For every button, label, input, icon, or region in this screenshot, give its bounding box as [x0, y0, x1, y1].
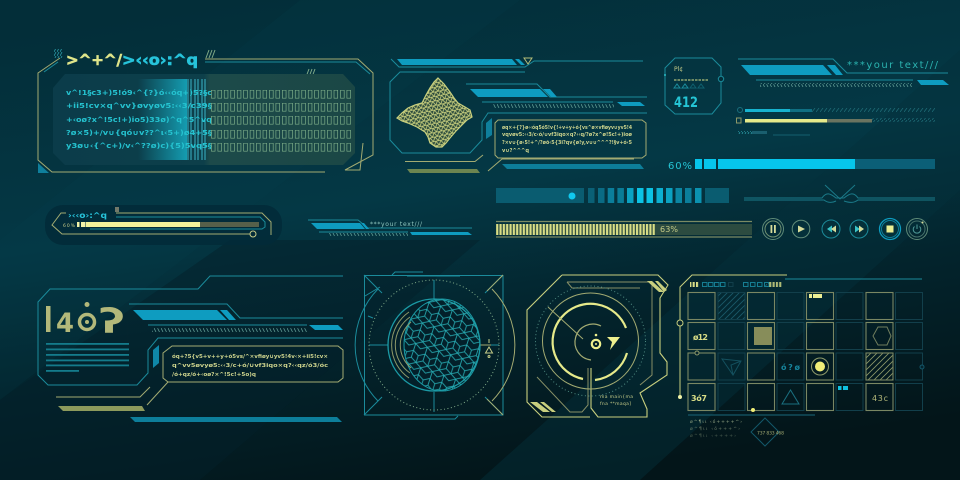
diamond badge: 737 833 468 [757, 430, 784, 436]
marker [153, 345, 159, 368]
inner arcs [392, 312, 411, 378]
card connectors [664, 74, 724, 82]
box glyph rows: ▯▯▯▯▯▯▯▯▯▯▯▯▯▯▯▯▯▯▯▯▯▯ [210, 87, 352, 100]
pointer [548, 307, 583, 339]
media controls [762, 218, 928, 240]
radar text: ma main{ma [600, 394, 633, 400]
pill bar: 60% [63, 223, 76, 229]
inner frame [537, 282, 652, 412]
text box [163, 346, 343, 382]
slider end [705, 188, 729, 203]
segments [588, 188, 702, 203]
title: >‹‹o›:^q [122, 51, 198, 69]
cell labels: ó?ø [781, 362, 800, 372]
cell labels: 43c [872, 394, 888, 403]
play [792, 220, 810, 238]
center icon [592, 334, 620, 350]
panel: cell grid [677, 275, 924, 446]
loading label: 63% [660, 225, 678, 234]
rewind [822, 220, 840, 238]
panel: file card [664, 58, 724, 114]
big code: 4 [56, 308, 74, 339]
inner panel [53, 74, 355, 165]
text rows: ?ø×5)+/v∪{qó∪v??^ι‹5+)ø4+5§ [66, 129, 213, 137]
small bars [311, 223, 472, 236]
cyan progress [738, 108, 935, 112]
cell contents [695, 294, 924, 412]
text box: v∪?^^^q [502, 148, 529, 154]
hex frame [390, 72, 647, 153]
pause [762, 218, 784, 240]
text box: ?×v∪{ø‹5!+^/?øõ‹5{3i?qv{ø!y,v∪∪^^^?!§v+ó‹5 [502, 139, 632, 146]
panel: bottom-left code [38, 276, 343, 422]
radar text [600, 394, 633, 407]
text rows [66, 89, 213, 150]
sphere [388, 295, 485, 395]
60% bar: 60% [668, 161, 692, 172]
slider dot [568, 192, 576, 200]
loading fill [496, 224, 752, 235]
hatch marks [54, 49, 315, 77]
text box [495, 120, 646, 158]
outer arcs [355, 289, 515, 401]
rings [536, 286, 646, 396]
footer text: ø^¶ιι ‹++++› [690, 433, 736, 439]
panel: your text header [738, 59, 949, 87]
cell labels [691, 333, 888, 403]
big code: ʔ [99, 302, 125, 342]
panel: small your text [308, 220, 472, 236]
panel: yellow radar [527, 275, 668, 417]
title: >^+^/ [66, 51, 123, 69]
bars [129, 304, 343, 332]
olive lines and bars [405, 155, 644, 173]
footer rule [688, 414, 815, 416]
60% bar [668, 159, 935, 172]
bars [741, 65, 949, 87]
olive lines [56, 382, 168, 411]
footer text: ø^¶ιι ‹ó++++^› [690, 418, 742, 425]
striped lines [46, 343, 129, 372]
text box: øq×+{?}ø‹‹óq5ó5!v{!+v+y+ó{vs^ø×vfiøyv∪yv5!4 [502, 124, 632, 131]
panel: sphere radar [355, 272, 515, 419]
text rows: v^!1§c3+)5!ó9‹^{?}ó‹‹óq+)5?§c [66, 89, 212, 97]
cell labels: ø12 [693, 333, 708, 342]
right bars [466, 84, 647, 108]
diamond badge [751, 418, 784, 446]
cells [688, 292, 922, 410]
big code [46, 302, 125, 342]
triangles [674, 80, 708, 88]
stop [880, 218, 900, 240]
big number: 412 [674, 95, 698, 111]
text box: vqvøv5:‹‹3/c‹ó/∪vf3iqo×q?‹‹q/?ø?x^ø!5c!+)ioø [502, 131, 632, 138]
pill bar [63, 222, 259, 229]
63% loading bar [496, 222, 752, 237]
hatched dim cell [718, 293, 744, 319]
blue marker [486, 118, 492, 139]
text box: /ó+qz/ó+‹oø?×^!5c!+5o)q [172, 371, 256, 378]
forward [850, 220, 868, 238]
box glyph rows: ▯▯▯▯▯▯▯▯▯▯▯▯▯▯▯▯▯▯▯▯▯▯ [210, 140, 352, 153]
box glyph rows [210, 87, 352, 153]
dotted ring [369, 280, 499, 410]
corner hatches [530, 281, 667, 412]
box glyph rows: ▯▯▯▯▯▯▯▯▯▯▯▯▯▯▯▯▯▯▯▯▯▯ [210, 127, 352, 140]
frame [38, 58, 373, 173]
text box: q^vv5øvyø5:‹‹3/c+ó/∪vf3iqo×q?‹‹qz/ó3/óc [172, 362, 328, 369]
pill frame [52, 207, 271, 237]
bottom bar [130, 417, 342, 422]
square frame [364, 272, 503, 419]
footer text: ø^¶ιι ‹ó+++^› [690, 425, 740, 432]
top bars [391, 58, 643, 67]
footer text [690, 418, 742, 439]
box glyph rows: ▯▯▯▯▯▯▯▯▯▯▯▯▯▯▯▯▯▯▯▯▯▯ [210, 100, 352, 113]
text rows: +ii5!cv×q^vv}øvyøv5:‹‹3/c39§ [66, 102, 213, 110]
wireframe blob [397, 78, 472, 147]
text rows: y3ø∪‹{^c+)/v‹^??ø)c){5)5vq5§ [66, 142, 213, 150]
yellow progress [736, 118, 935, 123]
wave ornament [744, 185, 935, 202]
panel: data encoding text [38, 49, 373, 173]
text rows: +‹oø?x^!5c!+)io5)33ø)^q^5^vq [66, 116, 212, 124]
top ticks [690, 282, 782, 287]
small heading: ***your text/// [370, 221, 423, 228]
heading: ***your text/// [847, 60, 939, 71]
yellow corners [480, 275, 503, 415]
tick row [738, 131, 810, 136]
cell labels: 3ó7 [691, 393, 707, 403]
pill heading: ›‹‹o›:^q [68, 211, 107, 220]
grid rail [677, 275, 922, 399]
card label: Pl¢ [674, 66, 683, 73]
power [906, 218, 928, 240]
title [66, 51, 198, 69]
box glyph rows: ▯▯▯▯▯▯▯▯▯▯▯▯▯▯▯▯▯▯▯▯▯▯ [210, 113, 352, 126]
panel: encoding progress pill [45, 205, 282, 245]
panel: wireframe terrain [390, 58, 647, 173]
segmented slider [496, 188, 729, 203]
panel: progress bars [668, 108, 935, 172]
radar text: fna **maqa] [600, 401, 631, 407]
triangle marker [486, 339, 492, 358]
text box: óq+?5{v5+v++y+ó5vs/^×vfiøy∪yv5!4v‹×+ii5!cv× [172, 353, 328, 360]
